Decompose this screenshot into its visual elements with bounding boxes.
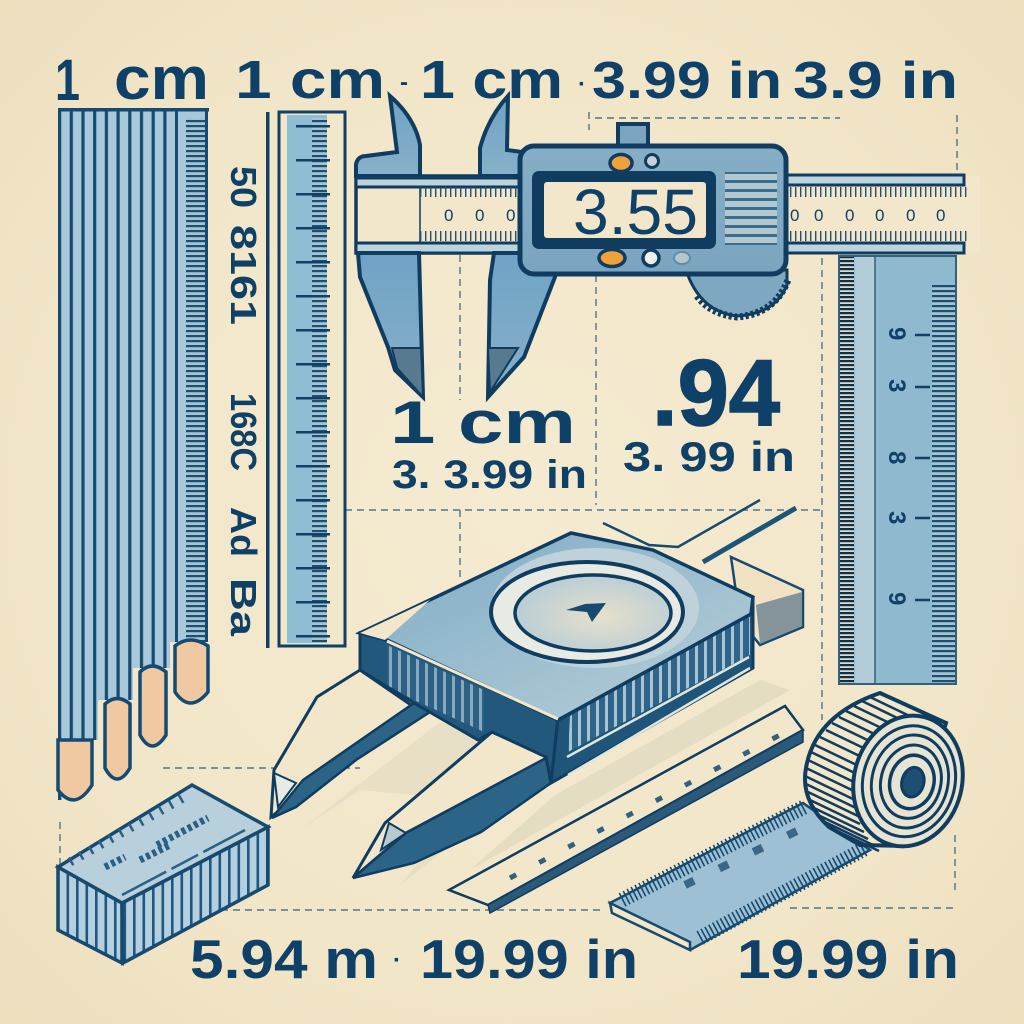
top labels: 1 bbox=[55, 48, 80, 113]
top labels: - bbox=[400, 69, 408, 96]
shadows bbox=[300, 722, 560, 885]
body top bbox=[360, 533, 753, 720]
vertical ruler, right: 3 bbox=[883, 511, 910, 524]
digital caliper: 0 bbox=[814, 206, 823, 225]
flat ruler bbox=[449, 706, 803, 913]
top labels: cm bbox=[114, 45, 209, 112]
rotated scale text: 8161 bbox=[223, 225, 264, 325]
vertical ruler, right bbox=[839, 256, 956, 684]
beam bbox=[356, 176, 526, 253]
tape end tips bbox=[58, 640, 208, 800]
rotated scale text bbox=[223, 166, 264, 637]
rotated scale text: Ba bbox=[223, 578, 264, 637]
top labels: · bbox=[578, 71, 586, 98]
isometric tape measure and caliper bbox=[271, 500, 803, 885]
top clip bbox=[618, 124, 648, 148]
digital caliper bbox=[356, 96, 980, 397]
digital caliper: 0 bbox=[506, 206, 515, 225]
vertical ruler, right: 9 bbox=[883, 592, 910, 605]
lower jaws bbox=[358, 253, 423, 397]
roll body bbox=[805, 693, 946, 846]
right jaw bbox=[353, 732, 549, 878]
thumbwheel bbox=[686, 270, 787, 316]
grille bbox=[725, 172, 777, 245]
vertical ruler, right: 3 bbox=[883, 379, 910, 392]
bottom labels: 19.99 in bbox=[420, 928, 638, 990]
rear platform bbox=[731, 557, 803, 645]
display housing bbox=[520, 146, 786, 274]
upper jaws bbox=[356, 96, 420, 176]
block eraser bbox=[58, 785, 268, 963]
digital caliper: 0 bbox=[475, 206, 484, 225]
middle labels: 3. 99 in bbox=[623, 433, 795, 480]
digital caliper: 0 bbox=[936, 206, 945, 225]
digital caliper: 0 bbox=[875, 206, 884, 225]
top labels: 3.9 in bbox=[793, 52, 958, 110]
digital caliper: 0 bbox=[845, 206, 854, 225]
body left side bbox=[360, 633, 558, 783]
bottom labels: · bbox=[393, 947, 401, 974]
vertical ruler, right: 8 bbox=[883, 451, 910, 464]
middle labels: .94 bbox=[652, 340, 780, 445]
stray strip behind bbox=[603, 500, 760, 547]
middle labels: 3. 3.99 in bbox=[392, 453, 587, 497]
middle labels: 1 cm bbox=[390, 389, 576, 456]
digital caliper: 0 bbox=[906, 206, 915, 225]
roll face bbox=[840, 704, 976, 858]
bottom labels: 5.94 m bbox=[190, 928, 378, 990]
digital caliper: 0 bbox=[790, 206, 799, 225]
top labels: 3.99 in bbox=[592, 52, 782, 110]
rolled tape bbox=[610, 693, 976, 950]
body right side bbox=[551, 600, 753, 783]
vertical ruler, right: 9 bbox=[883, 327, 910, 340]
dial bbox=[491, 548, 699, 668]
vertical ruler, left bbox=[266, 112, 345, 648]
bottom labels: 19.99 in bbox=[737, 928, 959, 990]
tape strips, left bbox=[58, 108, 209, 810]
top labels: 1 cm bbox=[420, 50, 563, 110]
rotated scale text: Ad bbox=[223, 507, 264, 557]
buttons bbox=[610, 154, 632, 172]
reading: 3.55 bbox=[573, 176, 698, 248]
bottom labels bbox=[190, 928, 959, 990]
digital caliper: 0 bbox=[444, 206, 453, 225]
LCD bbox=[532, 171, 716, 249]
rotated scale text: 168C bbox=[223, 393, 264, 471]
rotated scale text: 50 bbox=[223, 166, 264, 208]
dashed guide lines bbox=[60, 112, 958, 910]
left jaw bbox=[271, 670, 414, 817]
top labels bbox=[55, 45, 958, 113]
top labels: 1 cm bbox=[235, 50, 385, 110]
middle labels bbox=[390, 340, 795, 497]
